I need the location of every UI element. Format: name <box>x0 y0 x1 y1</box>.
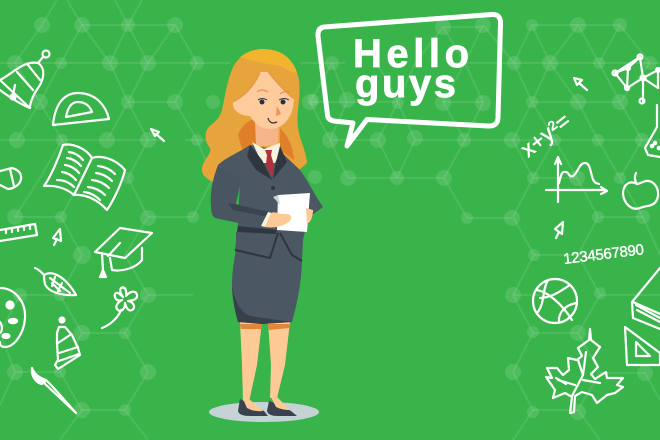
waist shadow <box>237 226 277 234</box>
icon: cursor lower <box>555 222 563 238</box>
icon: ruler <box>0 224 37 241</box>
icon: leaf <box>35 268 76 295</box>
jacket body <box>218 145 323 261</box>
icon: basketball <box>533 279 577 323</box>
icon: bell <box>0 50 50 108</box>
back hair <box>202 49 307 182</box>
lapels <box>247 145 287 180</box>
icon: protractor <box>53 93 109 125</box>
shirt collar <box>252 142 280 163</box>
icon: set square <box>625 327 660 365</box>
hand <box>265 212 291 228</box>
icon: cursor lower <box>53 229 61 245</box>
number sequence doodle: 1234567890 <box>562 241 645 268</box>
icon: molecule <box>612 54 660 104</box>
eyes and brows <box>260 100 264 104</box>
face <box>233 72 294 129</box>
jacket button <box>271 186 275 190</box>
greeting text line 2: guys <box>355 62 456 106</box>
icon: open book <box>44 145 125 210</box>
hair highlight <box>240 49 297 73</box>
icon: eraser <box>0 168 21 189</box>
icon: graduation cap <box>95 228 152 277</box>
right side school doodles <box>533 54 660 413</box>
paper sheets <box>277 193 310 232</box>
neck hair shadow <box>238 120 294 160</box>
icon: flask <box>645 105 660 157</box>
neck <box>255 120 279 146</box>
smile <box>268 118 277 123</box>
icon: cursor top <box>151 129 164 141</box>
woman character in business suit <box>202 49 323 422</box>
cuff <box>261 212 272 227</box>
icon: paint brush <box>32 368 76 413</box>
left arm <box>211 165 270 228</box>
icon: maple leaf <box>546 329 623 413</box>
nose <box>276 106 281 116</box>
icon: paint tube <box>55 318 80 369</box>
icon: book stack <box>632 268 660 329</box>
icon: clover flower <box>102 287 137 328</box>
speech bubble <box>318 14 500 146</box>
right fringe <box>268 65 299 99</box>
jacket hem line <box>235 233 302 261</box>
legs <box>240 322 262 402</box>
shoes <box>238 397 297 416</box>
icon: line chart <box>546 157 607 202</box>
icon: paint palette <box>0 288 25 347</box>
icon: apple <box>623 173 658 209</box>
tie <box>265 150 274 178</box>
left side school doodles <box>0 50 164 413</box>
maths formula doodle: x+y²= <box>516 108 575 162</box>
greeting text line 1: Hello <box>353 32 469 76</box>
floor shadow <box>209 402 319 422</box>
left fringe <box>232 64 260 102</box>
skirt <box>232 232 302 324</box>
icon: cursor <box>574 78 587 90</box>
hairline shade <box>233 72 294 102</box>
